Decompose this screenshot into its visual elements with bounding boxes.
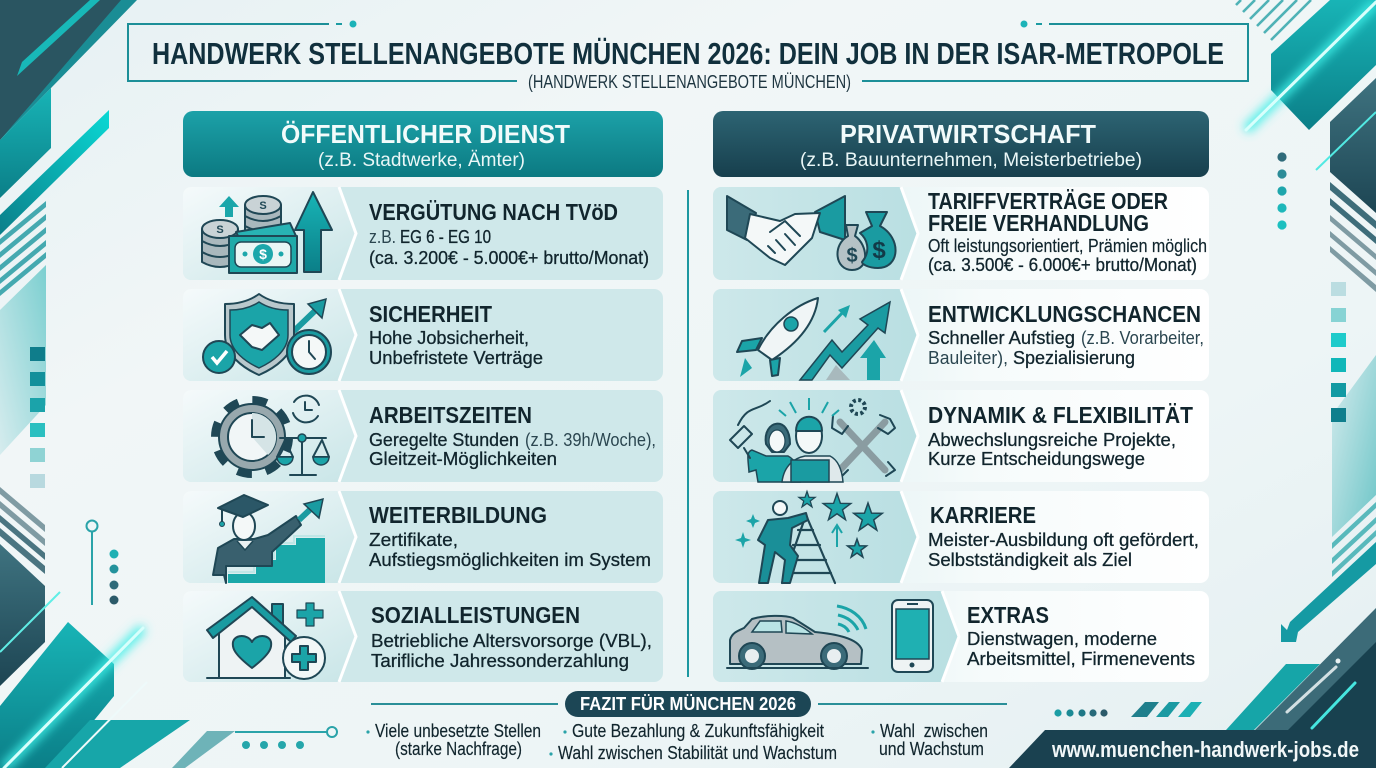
fazit bullet list: Viele unbesetzte Stellen (375, 721, 541, 741)
panel header: Privatwirtschaft: (z.B. Bauunternehmen, Meisterbetriebe) (800, 149, 1142, 171)
row: Sicherheit: Unbefristete Verträge (369, 347, 543, 368)
icon: gear clock and scales (217, 396, 329, 475)
icon: graduate with stairs and arrow (213, 495, 325, 583)
row: Entwicklungschancen: Schneller Aufstieg (928, 327, 1075, 348)
panel header: Öffentlicher Dienst (183, 111, 663, 177)
row: Entwicklungschancen (713, 289, 1209, 381)
row: Weiterbildung: WEITERBILDUNG (369, 502, 547, 528)
icon: two workers and crossed wrenches (730, 398, 895, 482)
row: Tarifverträge: Oft leistungsorientiert, Prämien möglich (928, 235, 1207, 256)
icon: car with signal waves (727, 606, 868, 669)
row: Vergütung nach TVöD: z.B. (369, 226, 396, 247)
row: Vergütung nach TVöD (183, 187, 663, 280)
subtitle: (HANDWERK STELLENANGEBOTE MÜNCHEN) (528, 72, 851, 92)
icon: coins and banknote (202, 192, 332, 273)
row: Extras: Arbeitsmittel, Firmenevents (967, 648, 1195, 669)
row: Extras: Dienstwagen, moderne (967, 628, 1157, 649)
row: Vergütung nach TVöD: VERGÜTUNG NACH TVöD (369, 199, 618, 225)
icon: handshake and money bags: $ (846, 245, 858, 267)
row: Weiterbildung: Zertifikate, (369, 529, 458, 550)
center divider (687, 190, 689, 677)
icon: coins and banknote: S (216, 224, 224, 236)
row: Karriere: KARRIERE (930, 502, 1036, 528)
row: Karriere: Selbstständigkeit als Ziel (928, 549, 1132, 570)
icon: coins and banknote: $ (259, 246, 267, 262)
row: Entwicklungschancen: Bauleiter), (928, 347, 1008, 368)
row: Sicherheit: Hohe Jobsicherheit, (369, 327, 529, 348)
row: Karriere: Meister-Ausbildung oft gefördert, (928, 529, 1199, 550)
decoration: footer dots and slashes (1054, 702, 1202, 717)
row: Extras (713, 591, 1209, 682)
fazit heading (371, 691, 1007, 717)
footer url banner (1009, 730, 1376, 768)
icon: coins and banknote: S (259, 200, 267, 212)
row: Dynamik & Flexibilität: Kurze Entscheidungswege (928, 448, 1145, 469)
fazit bullet list: Wahl zwischen Stabilität und Wachstum (558, 743, 837, 763)
panel header: Öffentlicher Dienst: ÖFFENTLICHER DIENST (281, 119, 570, 149)
fazit heading: FAZIT FÜR MÜNCHEN 2026 (580, 694, 796, 714)
icon: handshake and money bags: $ (872, 237, 886, 264)
row: Arbeitszeiten: Gleitzeit-Möglichkeiten (369, 448, 557, 469)
panel header: Privatwirtschaft (713, 111, 1209, 177)
icon: handshake and money bags (727, 196, 896, 270)
row: Sozialleistungen (183, 591, 663, 682)
icon: house with heart and plus (207, 597, 325, 679)
decoration: right side shapes (1226, 0, 1376, 730)
row: Weiterbildung (183, 491, 663, 583)
icon: rocket and rising arrows (737, 298, 890, 380)
row: Sicherheit: SICHERHEIT (369, 301, 493, 327)
row: Arbeitszeiten: (z.B. 39h/Woche), (525, 429, 656, 450)
row: Arbeitszeiten: ARBEITSZEITEN (369, 402, 532, 428)
fazit bullet list: Gute Bezahlung & Zukunftsfähigkeit (572, 721, 824, 741)
row: Entwicklungschancen: ENTWICKLUNGSCHANCEN (928, 301, 1201, 327)
row: Dynamik & Flexibilität: DYNAMIK & FLEXIBILITÄT (928, 402, 1194, 428)
row: Sozialleistungen: Tarifliche Jahressonderzahlung (371, 650, 629, 671)
row: Weiterbildung: Aufstiegsmöglichkeiten im System (369, 549, 651, 570)
row: Tarifverträge: (ca. 3.500€ - 6.000€+ brutto/Monat) (928, 254, 1197, 275)
icon: smartphone (892, 600, 933, 672)
row: Entwicklungschancen: Spezialisierung (1013, 347, 1135, 368)
icon: shield with handshake, check and clock (203, 294, 331, 375)
row: Arbeitszeiten: Geregelte Stunden (369, 429, 519, 450)
row: Entwicklungschancen: (z.B. Vorarbeiter, (1081, 327, 1204, 348)
fazit bullet list (366, 721, 988, 763)
row: Extras: EXTRAS (967, 602, 1049, 628)
row: Sicherheit (183, 289, 663, 381)
title frame (128, 20, 1248, 81)
row: Sozialleistungen: SOZIALLEISTUNGEN (371, 602, 580, 628)
row: Dynamik & Flexibilität (713, 390, 1209, 482)
row: Tarifverträge (713, 187, 1209, 280)
fazit bullet list: und Wachstum (879, 739, 984, 759)
panel header: Privatwirtschaft: PRIVATWIRTSCHAFT (840, 119, 1096, 149)
icon: person on ladder with stars (735, 492, 882, 583)
row: Vergütung nach TVöD: (ca. 3.200€ - 5.000€+ brutto/Monat) (369, 247, 649, 268)
row: Sozialleistungen: Betriebliche Altersvorsorge (VBL), (371, 630, 652, 651)
fazit bullet list: Wahl zwischen (880, 721, 988, 741)
panel header: Öffentlicher Dienst: (z.B. Stadtwerke, Ämter) (318, 149, 525, 171)
row: Arbeitszeiten (183, 390, 663, 482)
fazit bullet list: (starke Nachfrage) (395, 739, 522, 759)
row: Tarifverträge: FREIE VERHANDLUNG (928, 210, 1149, 236)
row: Karriere (713, 491, 1209, 583)
row: Vergütung nach TVöD: EG 6 - EG 10 (400, 226, 491, 247)
row: Dynamik & Flexibilität: Abwechslungsreiche Projekte, (928, 429, 1176, 450)
decoration: left side shapes (0, 0, 337, 768)
row: Tarifverträge: TARIFFVERTRÄGE ODER (928, 188, 1168, 214)
